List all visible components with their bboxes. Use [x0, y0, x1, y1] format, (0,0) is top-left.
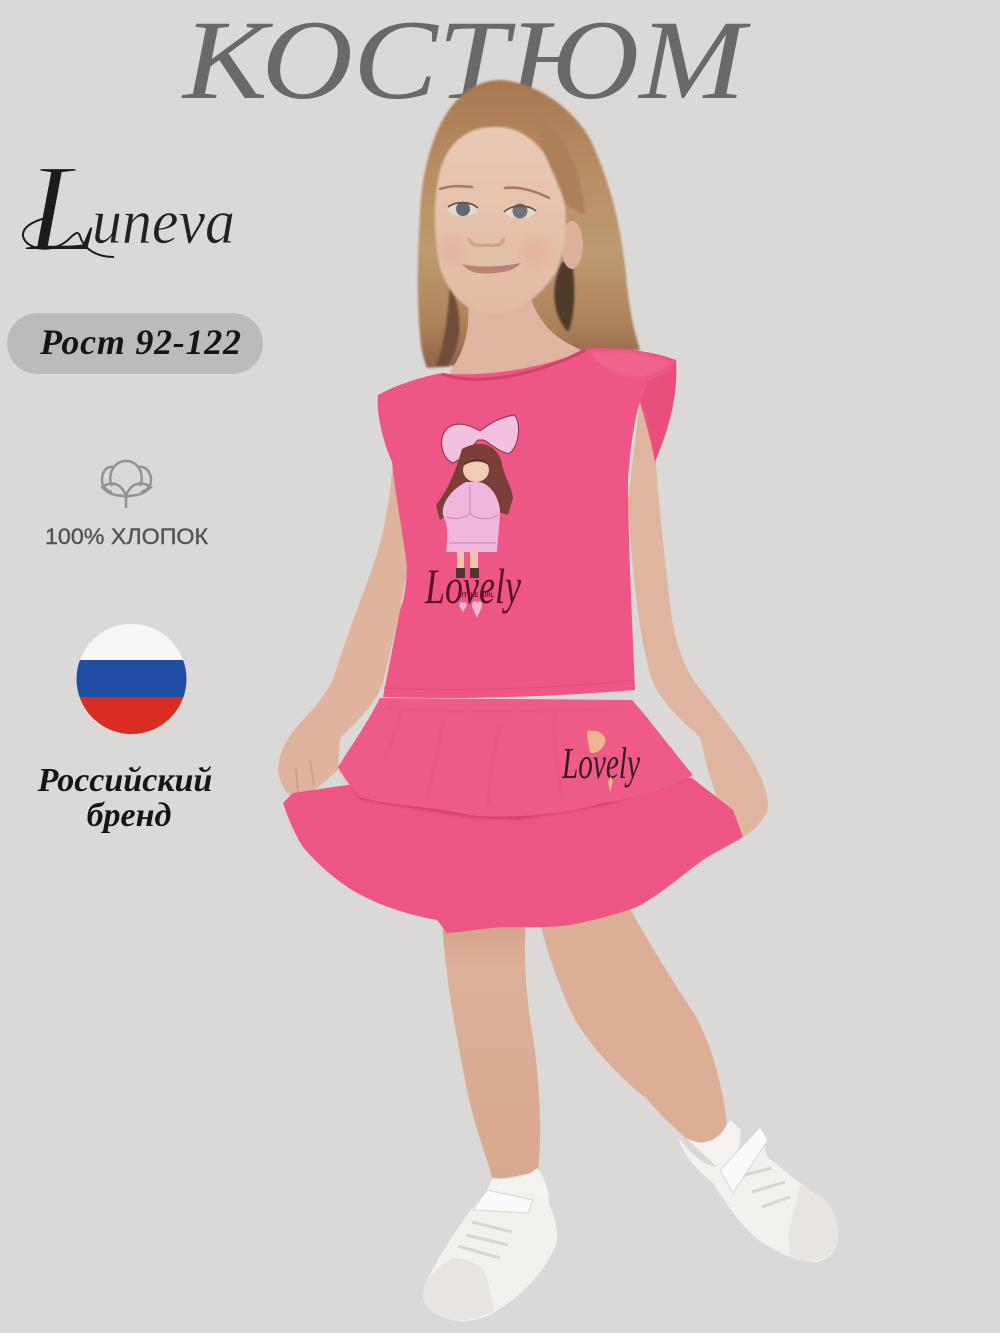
eyes: [448, 202, 536, 218]
left arm: [278, 440, 411, 802]
shoes of print: [456, 568, 479, 578]
skirt lower tier: [283, 778, 743, 933]
skirt upper tier gathers: [384, 708, 625, 805]
left sock: [486, 1168, 549, 1202]
right shoe laces: [745, 1168, 790, 1207]
right leg: [538, 900, 727, 1144]
shirt sleeve inner shade: [640, 360, 676, 462]
skirt upper tier: [338, 698, 693, 817]
print fringe: [463, 458, 490, 466]
shirt print text: Lovely: [424, 558, 522, 614]
hair: [418, 80, 640, 368]
brand logo: Luneva: uneva: [92, 186, 235, 257]
brand origin text: Российский: [37, 762, 212, 799]
left leg: [442, 915, 540, 1180]
left hand fingers: [296, 760, 314, 792]
neck: [450, 290, 585, 392]
left shoe toe: [423, 1258, 494, 1320]
skirt print: [561, 730, 640, 792]
shirt print hearts: [459, 601, 482, 618]
shirt neckline trim: [442, 350, 585, 379]
height badge: Рост 92-122: [39, 322, 241, 362]
right arm: [628, 400, 768, 837]
sweater of print: [443, 482, 500, 552]
shirt sleeve highlight: [590, 352, 672, 377]
right shoe strap: [720, 1127, 768, 1193]
shirt print: bow girl: [436, 415, 519, 578]
bow: [442, 415, 519, 463]
brand logo: Luneva: L: [24, 140, 100, 278]
left shoe laces: [458, 1222, 512, 1258]
legs of print: [457, 552, 478, 570]
face: [435, 127, 566, 314]
material label: 100% ХЛОПОК: [45, 524, 208, 549]
skirt print: Lovely: [561, 739, 640, 788]
face of print: [463, 458, 489, 482]
sweater sleeve lines: [446, 485, 498, 543]
height badge: [7, 313, 263, 374]
skirt upper tier shadow: [338, 767, 693, 820]
brand origin text: [37, 762, 212, 834]
eyebrows: [440, 186, 549, 198]
shirt print text: LITTLE GIRL: [458, 593, 495, 599]
ear: [561, 221, 583, 269]
mouth: [462, 263, 521, 273]
left shoe: [423, 1190, 557, 1321]
left shoe strap: [473, 1190, 533, 1213]
brand logo: Luneva: [23, 140, 235, 278]
hair shadow by neck: [554, 262, 574, 332]
shirt hem: [384, 680, 634, 690]
icon: cotton: [102, 461, 151, 508]
girl figure: [278, 80, 838, 1321]
icon: russian flag: [76, 624, 188, 735]
shirt: [378, 348, 676, 698]
title: КОСТЮМ: [181, 0, 752, 123]
right shoe: [678, 1127, 838, 1262]
cheek blush: [439, 236, 550, 266]
right shoe toe: [788, 1185, 838, 1261]
forehead hair shade: [532, 112, 585, 215]
hair of print: [436, 444, 513, 520]
nose: [469, 238, 504, 246]
right sock: [680, 1120, 741, 1167]
brand origin text: бренд: [87, 797, 172, 834]
